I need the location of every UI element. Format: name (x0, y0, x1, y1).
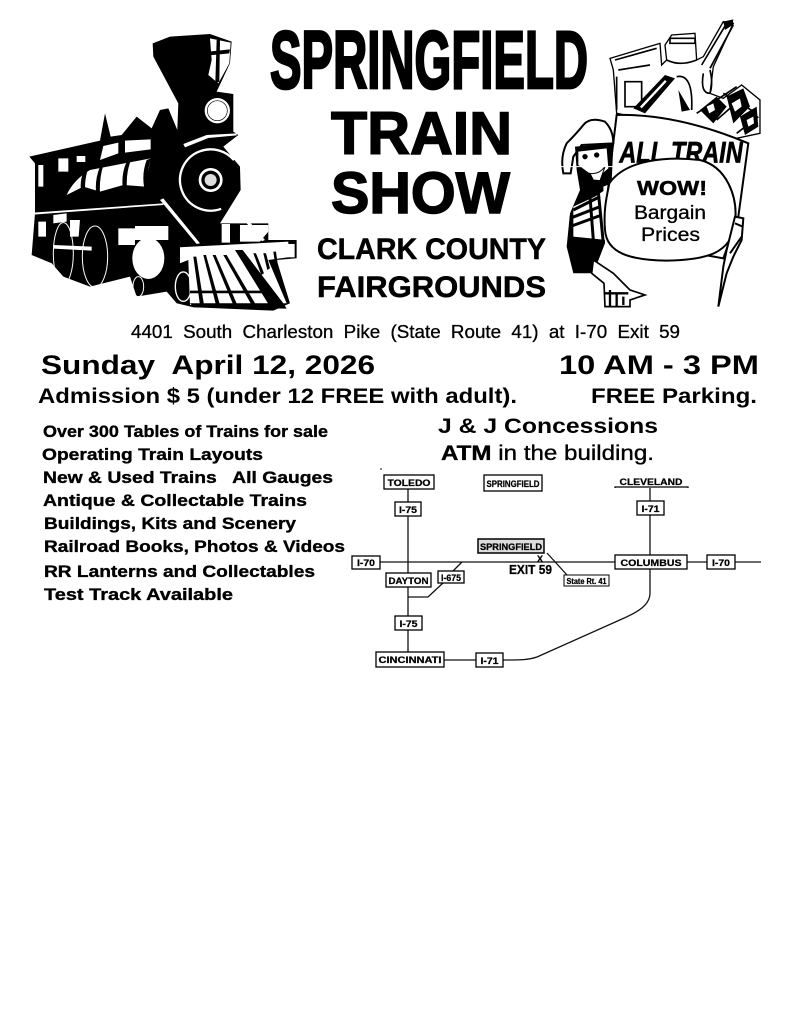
SPRINGFIELD marker (478, 539, 544, 553)
COLUMBUS (615, 555, 687, 569)
ATM note: ATM in the building. (441, 442, 654, 465)
bubble text: Prices: Prices (641, 225, 700, 246)
I-70 west: I-70 (357, 558, 375, 568)
I-70 east (707, 555, 735, 569)
TOLEDO (384, 475, 434, 489)
I-75 north: I-75 (399, 505, 417, 515)
heading: FAIRGROUNDS: FAIRGROUNDS (317, 271, 546, 304)
I-75 south (395, 616, 422, 630)
smokebox door (171, 141, 250, 219)
I-71 north: I-71 (642, 504, 660, 514)
CLEVELAND (615, 477, 688, 488)
EXIT 59: EXIT 59 (509, 563, 552, 577)
cowcatcher (180, 242, 288, 305)
admission: Admission $ 5 (under 12 FREE with adult). (38, 385, 517, 408)
saddle tank (132, 238, 164, 279)
title: TRAIN: TRAIN (331, 100, 512, 167)
DAYTON: DAYTON (388, 576, 428, 586)
arm and hand (592, 260, 645, 307)
concessions: J & J Concessions (438, 415, 658, 438)
CINCINNATI: CINCINNATI (378, 655, 442, 665)
CINCINNATI (376, 652, 444, 667)
SPRINGFIELD label (484, 475, 542, 491)
I-71 south: I-71 (480, 656, 498, 666)
bubble text: Bargain: Bargain (634, 203, 706, 224)
cap (562, 120, 613, 173)
I-675: I-675 (441, 573, 461, 583)
TOLEDO: TOLEDO (388, 478, 430, 488)
headlamp (205, 98, 230, 123)
cab windows (38, 156, 85, 237)
heading: CLARK COUNTY: CLARK COUNTY (317, 233, 546, 266)
bag body (603, 115, 748, 258)
State Rt. 41: State Rt. 41 (566, 577, 607, 586)
road map (352, 468, 761, 667)
CLEVELAND: CLEVELAND (620, 477, 683, 487)
boiler highlights (67, 158, 151, 195)
SPRINGFIELD marker: SPRINGFIELD (480, 542, 543, 552)
icon: man with bag of trains (550, 19, 760, 307)
bag lettering: ALL TRAIN (619, 137, 743, 170)
DAYTON (386, 573, 431, 587)
list item: Operating Train Layouts (42, 445, 263, 464)
parking: FREE Parking. (591, 385, 757, 408)
date: Sunday April 12, 2026 (41, 350, 375, 380)
I-71 north (637, 501, 664, 515)
stack highlights (208, 38, 231, 83)
speech bubble (605, 159, 736, 261)
striped shirt (573, 190, 607, 240)
I-675 (438, 571, 464, 583)
pilot wheels (175, 272, 191, 301)
list item: RR Lanterns and Collectables (44, 562, 315, 581)
I-71 south (476, 653, 503, 667)
bag contents (610, 22, 760, 138)
drive wheels (53, 223, 73, 284)
SPRINGFIELD label: SPRINGFIELD (486, 479, 540, 489)
I-75 south: I-75 (400, 619, 418, 629)
list item: Antique & Collectable Trains (43, 491, 307, 510)
I-70 east: I-70 (712, 558, 730, 568)
list item: New & Used Trains All Gauges (43, 468, 333, 487)
right hand (718, 217, 743, 307)
icon: steam locomotive (29, 34, 297, 311)
address line: 4401 South Charleston Pike (State Route 41) at I-70 Exit 59 (131, 321, 680, 342)
list item: Over 300 Tables of Trains for sale (43, 422, 328, 441)
I-75 north (395, 502, 421, 516)
feature list (42, 422, 345, 604)
bubble text: WOW!: WOW! (637, 178, 707, 200)
COLUMBUS: COLUMBUS (620, 558, 682, 568)
hours: 10 AM - 3 PM (559, 350, 759, 380)
map roads (380, 488, 761, 660)
I-70 west (352, 556, 380, 569)
list item: Test Track Available (44, 585, 233, 604)
face and beard (567, 143, 613, 273)
X marker: X (537, 554, 543, 564)
list item: Buildings, Kits and Scenery (44, 514, 297, 533)
title: SHOW: SHOW (331, 161, 510, 226)
list item: Railroad Books, Photos & Videos (44, 537, 345, 556)
